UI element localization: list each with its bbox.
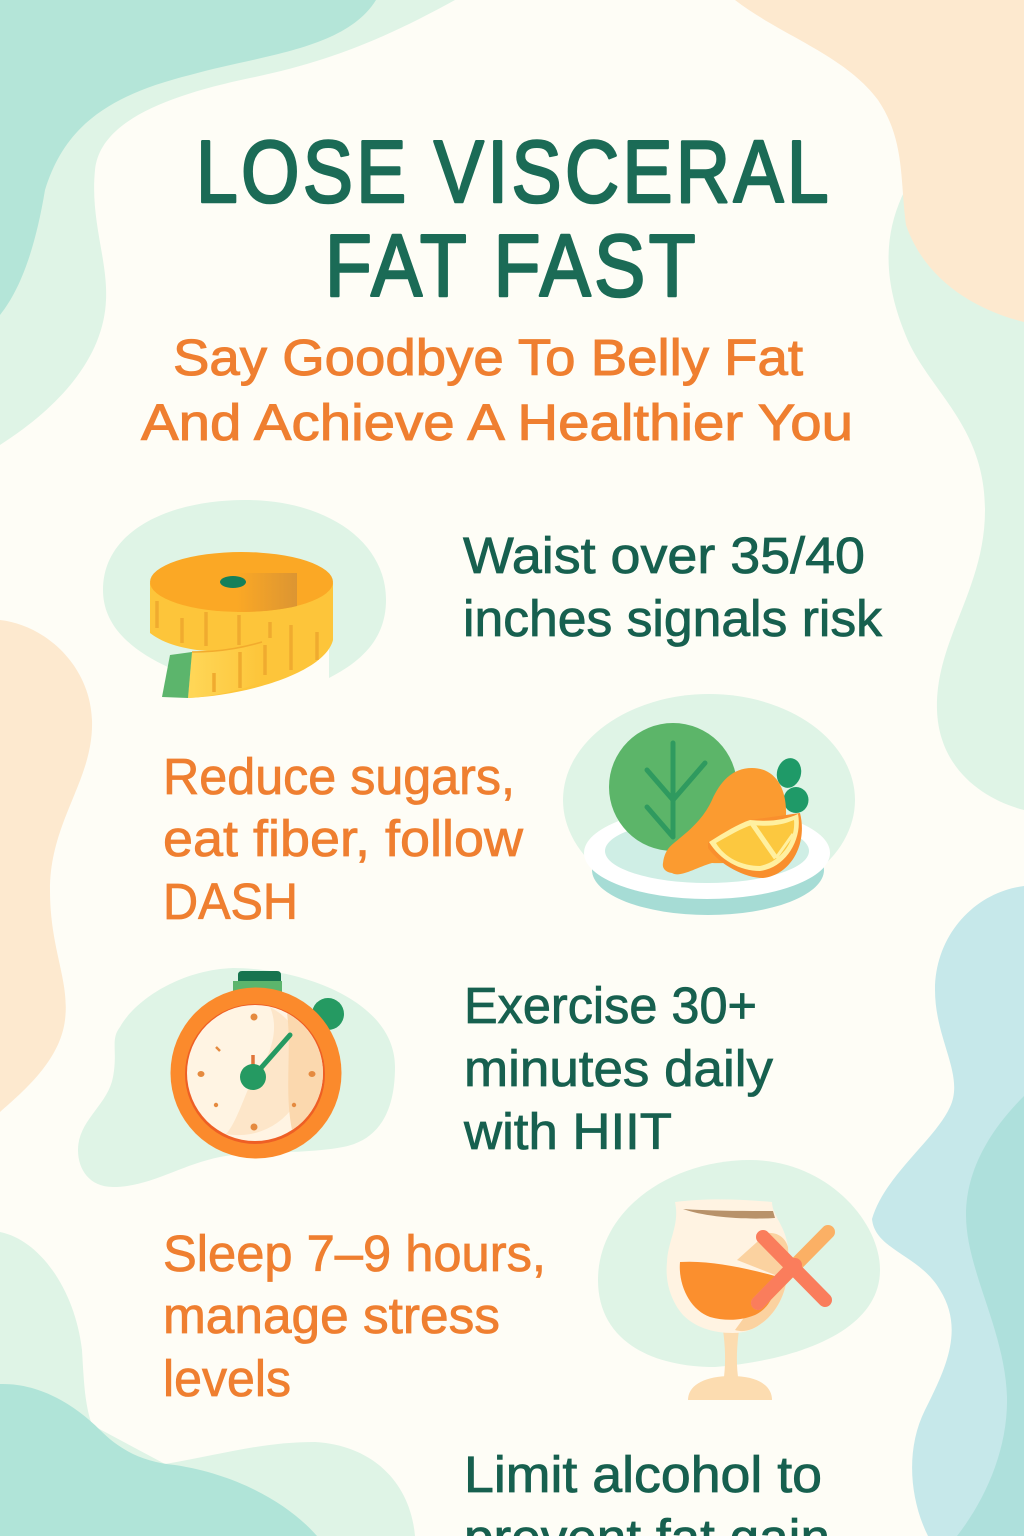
- text: diet: [163, 748, 523, 930]
- background: bottom-left teal wave: [0, 1384, 317, 1536]
- icon: plate of vegetables: [563, 694, 855, 915]
- icon: measuring tape: [103, 500, 386, 698]
- text: exercise: [463, 977, 774, 1160]
- text: sleep: Sleep 7–9 hours,: [163, 1225, 546, 1282]
- background: right mint wave: [889, 190, 1024, 810]
- text: waist: inches signals risk: [463, 590, 883, 647]
- text: exercise: minutes daily: [464, 1040, 774, 1097]
- icon: stopwatch: [78, 968, 395, 1187]
- background: bottom-left mint wave: [0, 1232, 415, 1536]
- text: diet: eat fiber, follow: [163, 810, 523, 867]
- text: alcohol: Limit alcohol to: [464, 1446, 822, 1503]
- text: waist: Waist over 35/40: [463, 527, 865, 584]
- text: sleep: levels: [163, 1350, 291, 1407]
- background: top-left teal wave: [0, 0, 376, 315]
- text: alcohol: [464, 1446, 830, 1536]
- background: bottom-right blue wave: [872, 886, 1024, 1536]
- title: FAT FAST: [325, 216, 699, 315]
- background: top-right peach wave: [735, 0, 1024, 322]
- text: diet: DASH: [163, 873, 298, 930]
- background: left peach wave: [0, 620, 92, 1112]
- background: top-left mint wave: [0, 0, 455, 445]
- icon: wine glass crossed out: [598, 1160, 880, 1400]
- text: exercise: Exercise 30+: [464, 977, 757, 1034]
- subtitle: Say Goodbye To Belly Fat: [173, 329, 803, 386]
- title: LOSE VISCERAL: [196, 122, 832, 221]
- text: waist: [463, 527, 883, 647]
- text: sleep: manage stress: [163, 1287, 500, 1344]
- title: [196, 122, 832, 315]
- subtitle: [141, 329, 853, 451]
- background: bottom-right teal wave: [957, 1096, 1024, 1536]
- text: exercise: with HIIT: [463, 1103, 672, 1160]
- subtitle: And Achieve A Healthier You: [141, 394, 853, 451]
- text: diet: Reduce sugars,: [163, 748, 515, 805]
- text: sleep: [163, 1225, 546, 1407]
